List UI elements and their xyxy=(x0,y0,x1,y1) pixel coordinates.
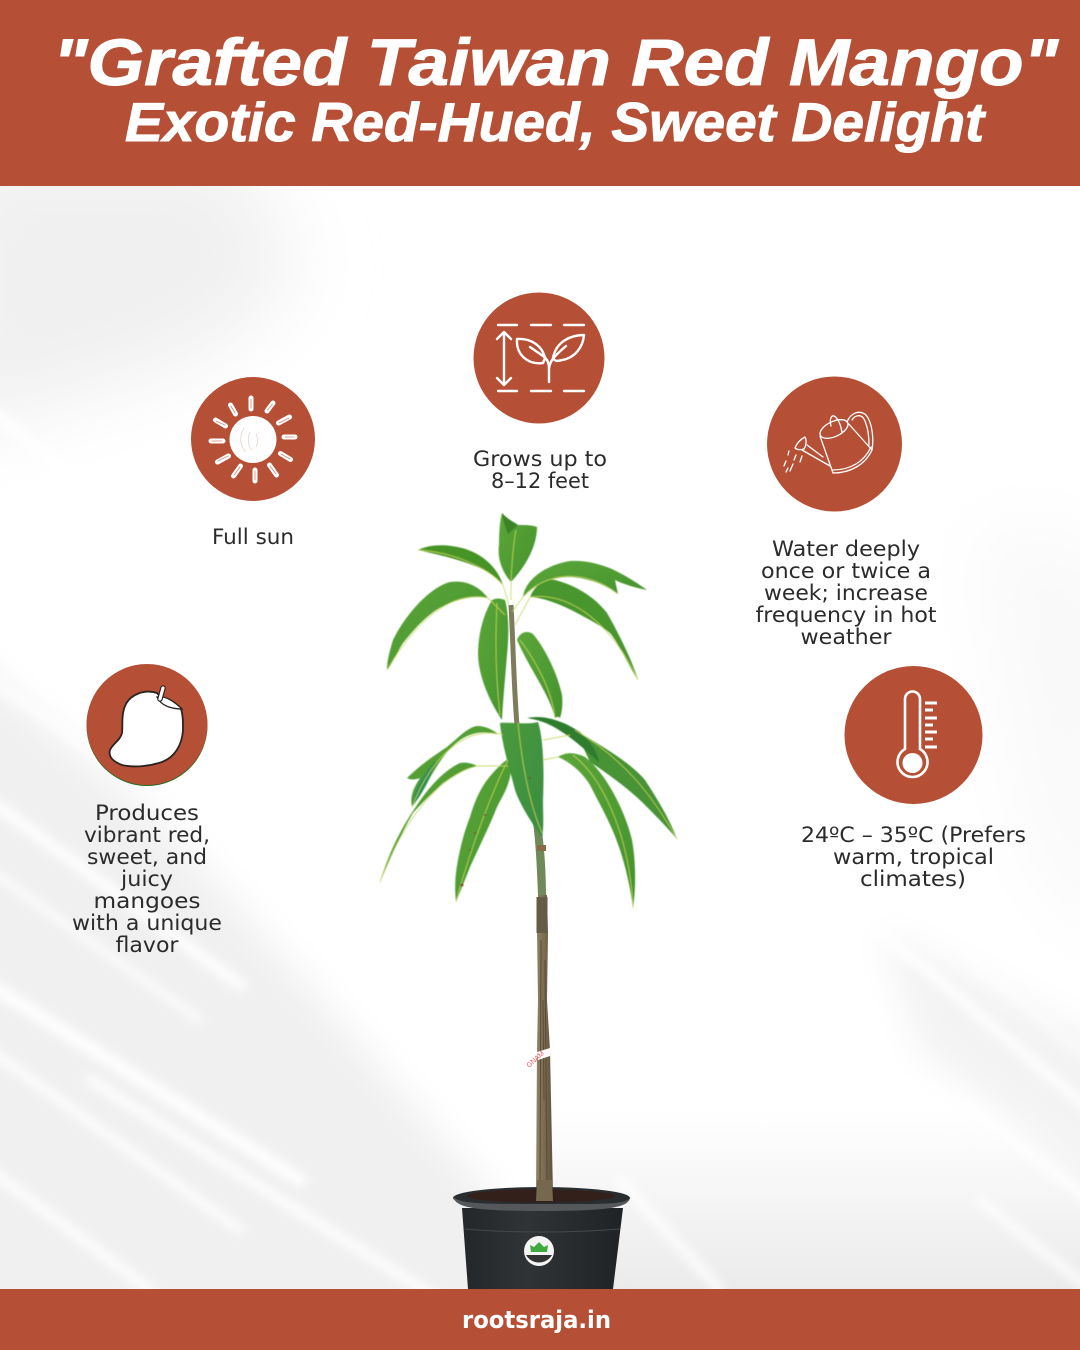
label xyxy=(72,801,222,957)
upper left leaf xyxy=(418,545,503,585)
lower left upper leaf xyxy=(407,726,498,807)
label: week; increase xyxy=(764,581,928,605)
midribs and petioles xyxy=(380,530,677,908)
label: mangoes xyxy=(94,889,200,913)
top leaf xyxy=(499,513,537,582)
label: Full sun xyxy=(212,525,294,549)
website: rootsraja.in xyxy=(462,1306,611,1334)
label: sweet, and xyxy=(87,845,207,869)
pot xyxy=(453,1180,630,1289)
label xyxy=(801,823,1026,891)
wide left leaf xyxy=(387,582,488,670)
label: Produces xyxy=(95,801,199,825)
lower right drooping leaf xyxy=(558,753,635,908)
brown leaf spots xyxy=(460,777,531,886)
front central leaf xyxy=(500,722,543,837)
trunk xyxy=(511,605,553,1195)
leaves xyxy=(380,513,677,908)
icon: watering can xyxy=(767,376,902,512)
icon: sun xyxy=(191,377,315,501)
label xyxy=(756,537,936,649)
right large leaf xyxy=(530,580,638,680)
lower left long leaf xyxy=(380,763,477,882)
label: once or twice a xyxy=(761,559,931,583)
item: temperature xyxy=(801,666,1026,891)
label: Water deeply xyxy=(772,537,920,561)
lower right big leaf xyxy=(575,730,677,839)
label: weather xyxy=(800,625,892,649)
label: warm, tropical xyxy=(833,845,994,869)
label: juicy xyxy=(120,867,173,891)
logo sticker xyxy=(524,1236,554,1266)
icon: plant height xyxy=(474,292,604,424)
back-right leaf xyxy=(523,561,647,597)
label: vibrant red, xyxy=(84,823,210,847)
header band xyxy=(0,0,1080,186)
lower centre-left leaf xyxy=(455,759,511,902)
label xyxy=(473,447,607,493)
mango plant in pot xyxy=(380,513,677,1289)
label: 24ºC – 35ºC (Prefers xyxy=(801,823,1026,847)
item: fruit xyxy=(72,664,222,957)
label: climates) xyxy=(860,867,966,891)
top leaf fold xyxy=(502,513,518,534)
icon: thermometer xyxy=(844,666,982,804)
label: Grows up to xyxy=(473,447,607,471)
item: water xyxy=(756,376,936,649)
label: 8–12 feet xyxy=(491,469,589,493)
item: height xyxy=(473,292,607,493)
trunk base over soil xyxy=(536,1180,553,1201)
lower right small dark leaf xyxy=(527,717,599,762)
label: frequency in hot xyxy=(756,603,936,627)
label: flavor xyxy=(116,933,179,957)
icon: mango xyxy=(86,664,208,786)
tag on trunk: GNAM xyxy=(526,1050,546,1069)
lower left inner teal leaf xyxy=(412,760,436,807)
title line 2: Exotic Red-Hued, Sweet Delight xyxy=(125,91,987,153)
footer band xyxy=(0,1289,1080,1350)
small inner leaf xyxy=(517,632,562,718)
title line 1: "Grafted Taiwan Red Mango" xyxy=(53,25,1059,99)
centre hanging leaf xyxy=(478,598,508,720)
item: sun xyxy=(191,377,315,549)
label: with a unique xyxy=(72,911,222,935)
